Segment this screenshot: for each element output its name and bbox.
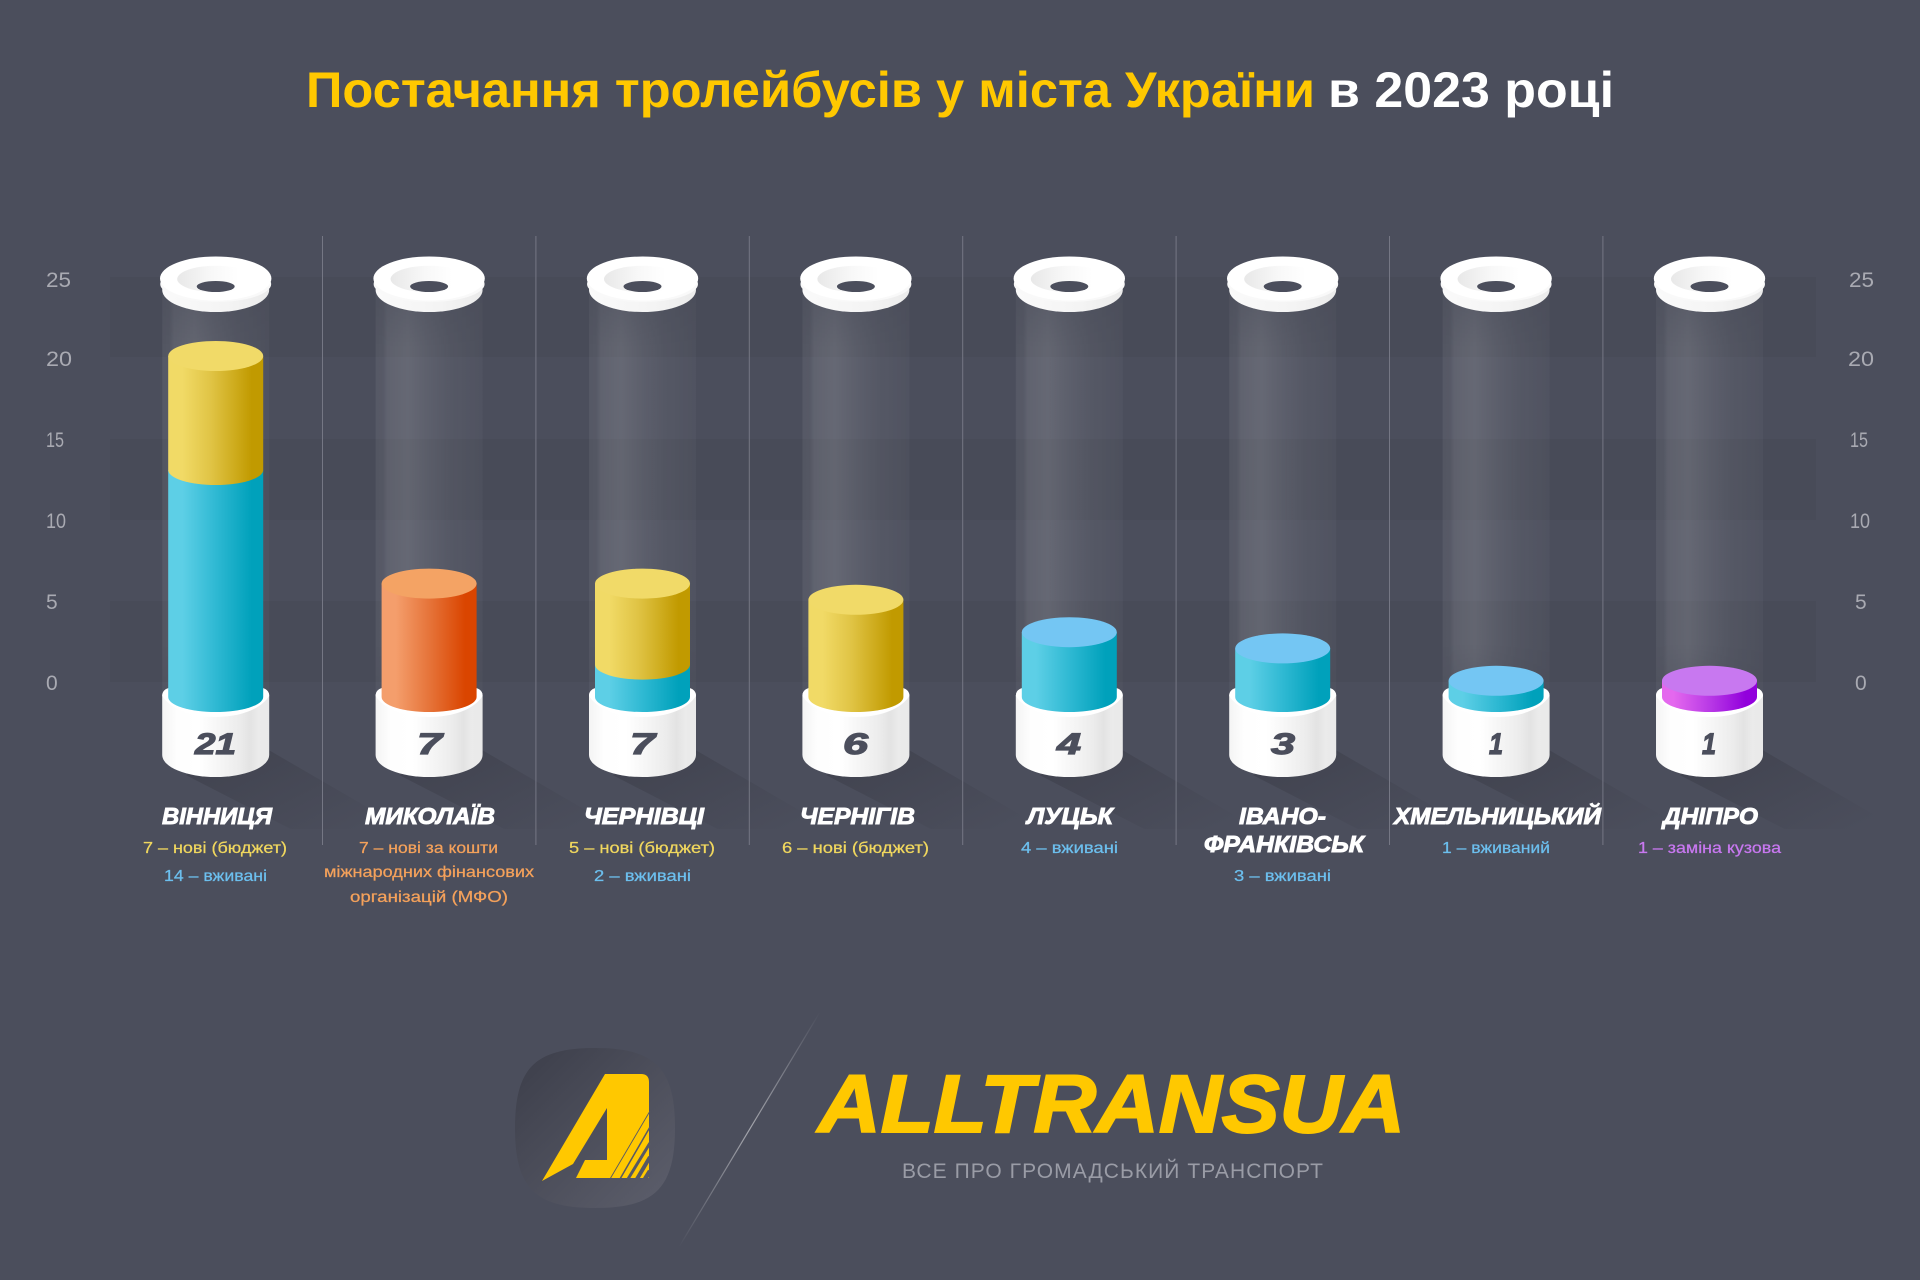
right axis labels: 10 [1850, 510, 1870, 533]
column: Дніпро [1638, 256, 1781, 857]
detail [324, 840, 534, 906]
detail: 5 – нові (бюджет) [569, 840, 715, 857]
base [1016, 688, 1123, 777]
tube [1016, 285, 1123, 705]
city label: ФРАНКІВСЬК [1204, 831, 1366, 857]
chart grid bands [110, 277, 1816, 682]
column: Івано-Франківськ [1204, 256, 1366, 885]
detail: міжнародних фінансових [324, 864, 534, 881]
tube [162, 285, 269, 705]
city label [1204, 803, 1366, 857]
detail: організацій (МФО) [350, 889, 508, 906]
detail: 3 – вживані [1234, 868, 1331, 885]
tagline: ВСЕ ПРО ГРОМАДСЬКИЙ ТРАНСПОРТ [902, 1159, 1323, 1183]
cap [373, 256, 485, 312]
cap [1227, 256, 1338, 312]
base [1656, 688, 1763, 777]
column: Чернівці [569, 256, 715, 885]
cap [587, 256, 698, 312]
detail: 7 – нові за кошти [359, 840, 498, 857]
column shadows [186, 750, 1875, 829]
stacked bar: 2 used, 5 new [595, 569, 690, 712]
column: Луцьк [1014, 256, 1125, 857]
column: Вінниця [143, 256, 287, 885]
tube [376, 285, 483, 705]
city label: ВІННИЦЯ [162, 803, 273, 829]
column: Чернігів [782, 256, 929, 857]
detail: 2 – вживані [594, 868, 691, 885]
stacked bar: 14 used, 7 new [168, 341, 263, 712]
detail [569, 840, 715, 885]
cap [1014, 256, 1125, 312]
logo icon [515, 1048, 675, 1208]
tube [802, 285, 909, 705]
value: 1 [1489, 728, 1503, 761]
tube [1229, 285, 1336, 705]
right axis labels: 20 [1848, 348, 1874, 371]
value: 3 [1271, 728, 1295, 761]
base [162, 688, 269, 777]
right axis labels: 5 [1855, 591, 1867, 614]
title: в 2023 році [1328, 62, 1614, 118]
detail [143, 840, 287, 885]
left axis labels: 25 [46, 269, 71, 292]
detail: 7 – нові (бюджет) [143, 840, 287, 857]
detail: 1 – заміна кузова [1638, 840, 1781, 857]
detail: 14 – вживані [164, 868, 267, 885]
city label: ХМЕЛЬНИЦЬКИЙ [1392, 801, 1601, 829]
right axis labels: 25 [1849, 269, 1874, 292]
city label: ЛУЦЬК [1025, 803, 1115, 829]
column: Миколаїв [324, 256, 534, 906]
detail: 4 – вживані [1021, 840, 1118, 857]
base [589, 688, 696, 777]
bar: 3 used [1235, 633, 1330, 712]
detail: 6 – нові (бюджет) [782, 840, 929, 857]
bar: 4 used [1022, 617, 1117, 712]
value: 1 [1702, 728, 1716, 761]
city label: МИКОЛАЇВ [365, 803, 495, 829]
left axis labels: 0 [46, 672, 58, 695]
right axis labels: 15 [1850, 429, 1868, 452]
detail: 1 – вживаний [1442, 840, 1550, 857]
cap [800, 256, 912, 312]
value: 7 [630, 728, 657, 761]
value: 6 [843, 728, 868, 761]
cap [1440, 256, 1552, 312]
left axis labels: 15 [46, 429, 64, 452]
tube [1656, 285, 1763, 705]
left axis labels: 20 [46, 348, 72, 371]
value: 7 [417, 728, 444, 761]
base [376, 688, 483, 777]
bar: 6 new [808, 585, 903, 712]
right axis labels [1848, 269, 1874, 695]
value: 21 [194, 728, 236, 761]
logo wordmark: ALLTRANSUA [816, 1059, 1405, 1150]
tube [1443, 285, 1550, 705]
city label: ЧЕРНІГІВ [800, 803, 915, 829]
base [1443, 688, 1550, 777]
city label: ЧЕРНІВЦІ [584, 803, 705, 829]
title: Постачання тролейбусів у міста України [306, 62, 1315, 118]
left axis labels: 5 [46, 591, 58, 614]
value: 4 [1056, 728, 1081, 761]
bar: 1 used [1449, 666, 1544, 712]
left axis labels [46, 269, 72, 695]
bar: 1 body replacement [1662, 666, 1757, 712]
city label: ДНІПРО [1661, 803, 1758, 829]
cap [1654, 256, 1765, 312]
base [802, 688, 909, 777]
right axis labels: 0 [1855, 672, 1867, 695]
cap [160, 256, 271, 312]
city label: ІВАНО- [1239, 803, 1326, 829]
column: Хмельницький [1392, 256, 1601, 857]
bar: 7 new [382, 569, 477, 712]
left axis labels: 10 [46, 510, 66, 533]
tube [589, 285, 696, 705]
base [1229, 688, 1336, 777]
